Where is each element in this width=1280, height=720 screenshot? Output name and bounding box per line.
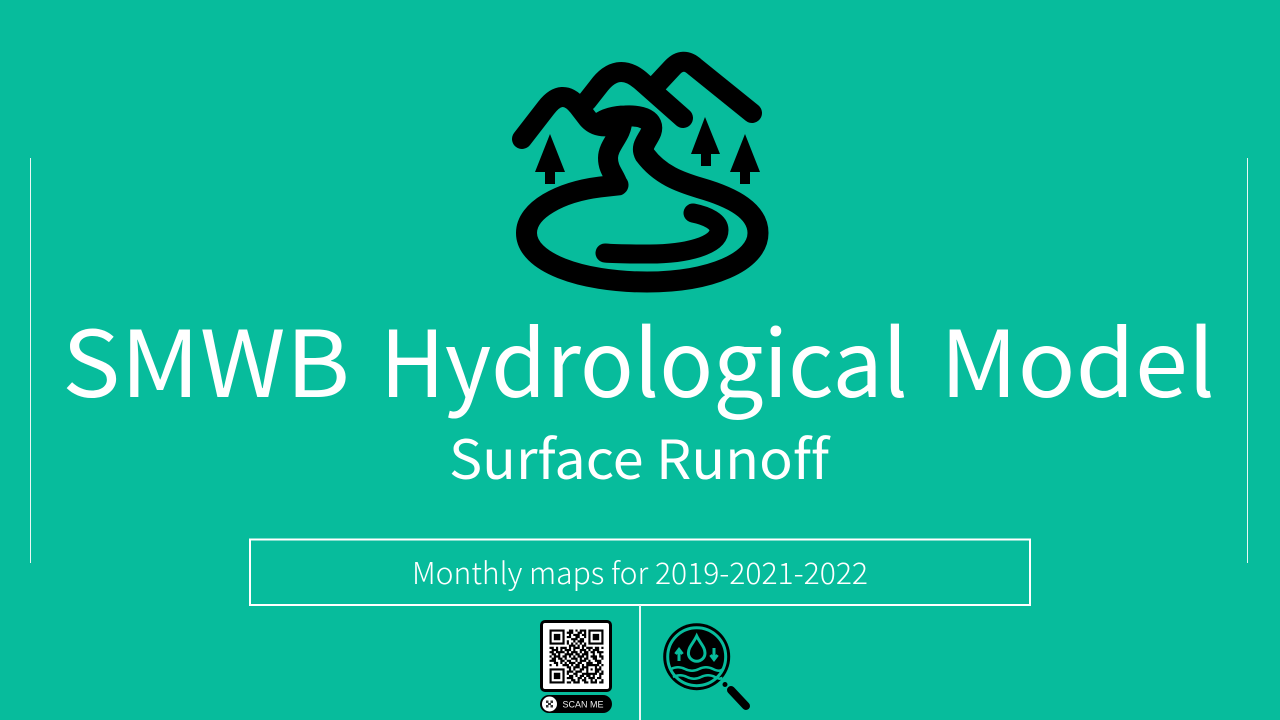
arrow down (710, 648, 718, 660)
title: Hydrological (380, 291, 908, 424)
date range box (250, 540, 1030, 605)
middle mountain (587, 72, 683, 118)
QR code (540, 620, 612, 692)
scan me badge (540, 695, 612, 713)
icon: magnifier with water drop (663, 623, 746, 706)
QR modules (550, 631, 604, 682)
lake inner spiral (605, 213, 719, 254)
icon: tree right (730, 134, 760, 184)
title: Model (940, 291, 1215, 424)
arrow up (676, 650, 682, 661)
icon: mountains, river and lake (522, 62, 758, 282)
scan me label: SCAN ME (562, 699, 604, 709)
water drop (688, 636, 705, 661)
subtitle: Surface Runoff (449, 416, 832, 495)
date range label: Monthly maps for 2019-2021-2022 (412, 549, 868, 593)
right mountain (658, 62, 752, 113)
left mountain (522, 97, 610, 139)
icon: tree middle (691, 117, 720, 166)
river and lake outline (526, 116, 758, 282)
waves (671, 667, 723, 679)
river left bank (608, 122, 622, 185)
icon: tree left (535, 134, 565, 184)
title: SMWB (62, 291, 350, 424)
magnifier handle (722, 682, 728, 687)
